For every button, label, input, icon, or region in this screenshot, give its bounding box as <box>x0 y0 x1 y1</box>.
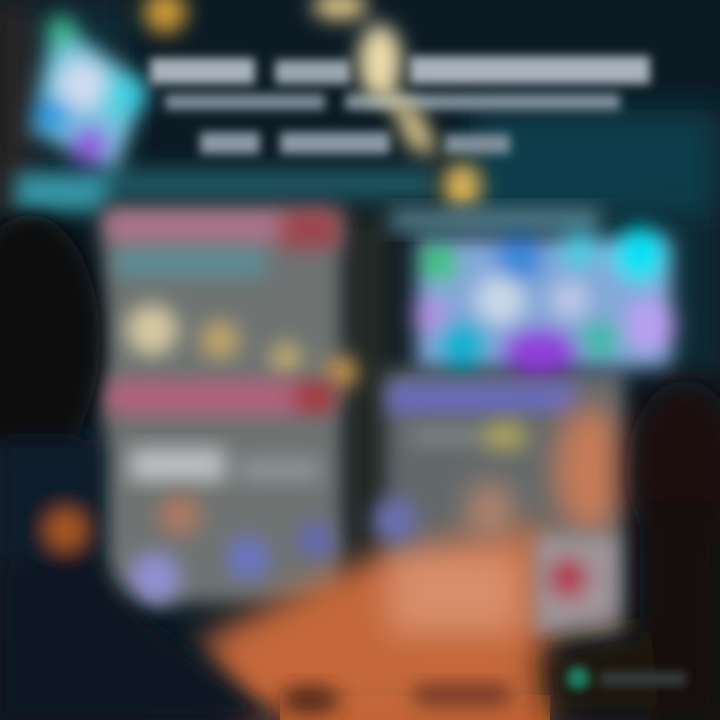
right panel body <box>385 370 625 640</box>
right panel accent <box>410 420 529 452</box>
panel: right <box>385 208 676 640</box>
person: right silhouette <box>540 380 720 720</box>
logo watermark <box>566 666 686 690</box>
teal title band <box>15 168 435 212</box>
icon: holographic diamond <box>30 16 148 172</box>
holographic screen <box>412 227 676 376</box>
wooden table <box>200 525 560 720</box>
string lights <box>143 0 482 210</box>
panel: left <box>104 208 358 603</box>
left panel body <box>104 208 342 603</box>
left panel lower header <box>105 380 335 414</box>
card on table <box>535 535 620 635</box>
left panel lower text <box>130 448 320 482</box>
title text block <box>150 56 650 154</box>
left panel lights <box>126 304 358 388</box>
right panel heading <box>390 208 600 232</box>
purple icons row <box>129 493 417 604</box>
hand <box>468 404 626 538</box>
right panel lower header <box>388 384 578 412</box>
bottom table markers <box>280 685 510 714</box>
person: left silhouette <box>0 215 280 720</box>
left panel header <box>105 210 340 276</box>
